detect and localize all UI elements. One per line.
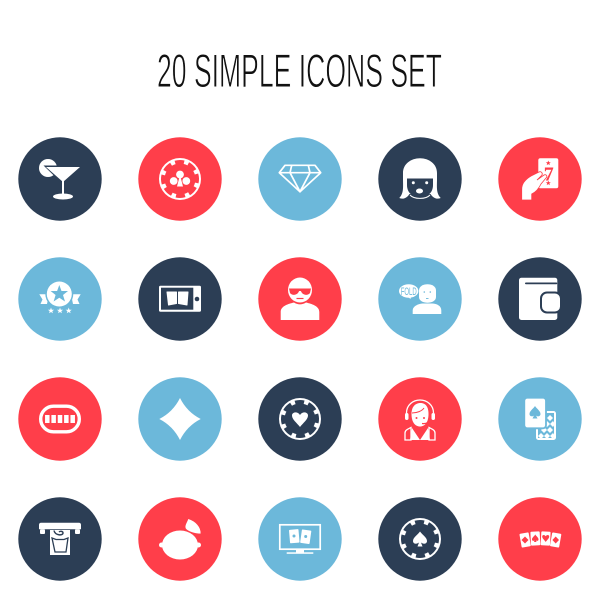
icon: wallet xyxy=(498,257,582,341)
icon: fold speech bubble: FOLD xyxy=(401,286,417,298)
icon: star badge xyxy=(18,257,102,341)
icon: diamond gem xyxy=(258,137,342,221)
icon: slot reels xyxy=(18,377,102,461)
icon: spade chip xyxy=(378,497,462,581)
icon: fold speech bubble xyxy=(378,257,462,341)
icon: four cards hand xyxy=(498,497,582,581)
icon: tablet with cards xyxy=(138,257,222,341)
icon: lemon xyxy=(138,497,222,581)
icon: hand holding card: 7 xyxy=(544,164,554,186)
icon: cocktail xyxy=(18,137,102,221)
icon: cash machine xyxy=(18,497,102,581)
icon: monitor with cards xyxy=(258,497,342,581)
icon: playing cards xyxy=(498,377,582,461)
icon: man with sunglasses xyxy=(258,257,342,341)
icon: headset operator xyxy=(378,377,462,461)
icon: hand holding card xyxy=(498,137,582,221)
icon: diamond suit xyxy=(138,377,222,461)
icon: club chip xyxy=(138,137,222,221)
icon: heart chip xyxy=(258,377,342,461)
icon: woman xyxy=(378,137,462,221)
